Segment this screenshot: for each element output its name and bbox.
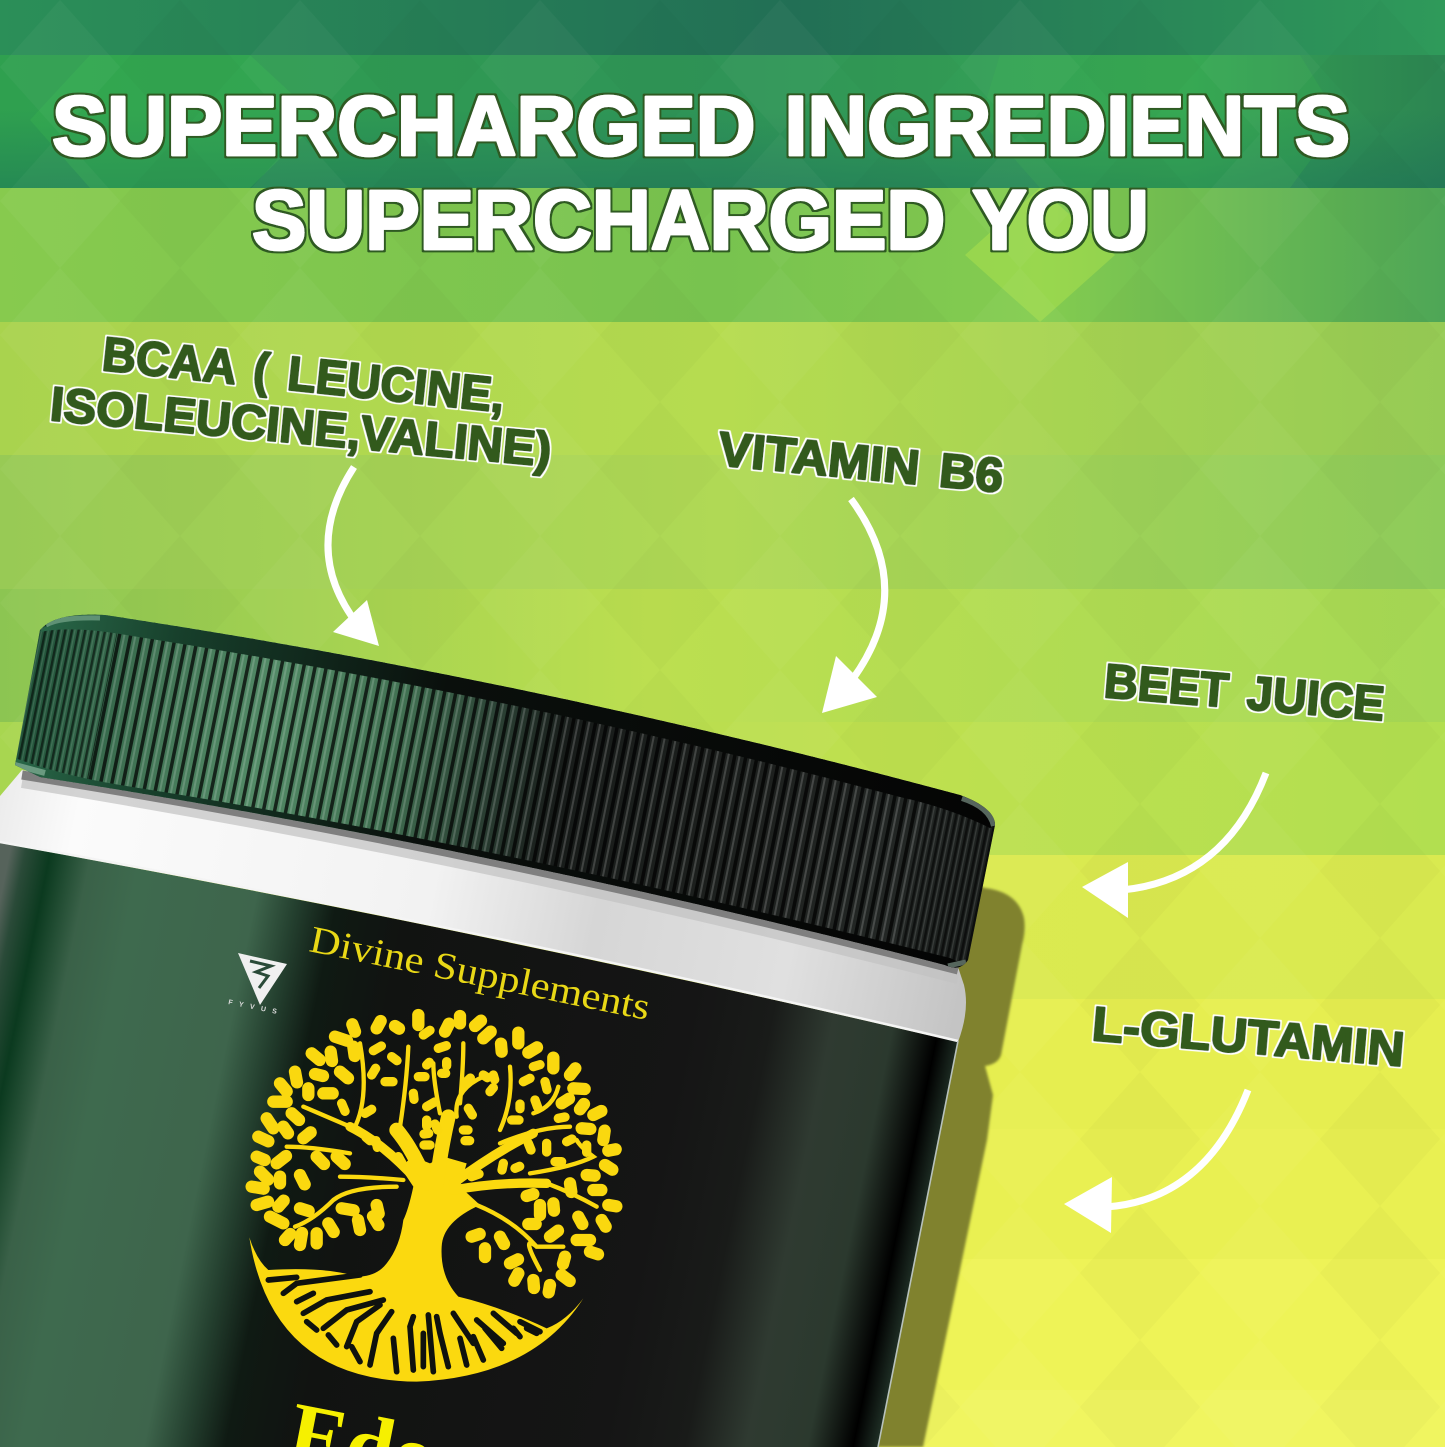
jar body [0,843,958,1447]
arrow: Beet Juice to jar [1082,773,1266,918]
jar neck [0,770,966,1042]
jar cap [15,614,995,968]
title: SUPERCHARGED INGREDIENTS [52,79,1350,173]
brand logo [228,953,287,1017]
label: BCAA [48,328,554,477]
label: BCAA: BCAA ( LEUCINE, [100,328,507,423]
jar shadow [860,880,1025,1447]
arrow: Vitamin B6 to jar [822,499,885,713]
arrow: BCAA to jar [328,467,379,646]
tree of life emblem [249,1015,616,1382]
jar edge highlights [0,842,958,1447]
branches [397,1117,448,1183]
brand name: Divine Supplements: Divine Supplements [306,919,654,1029]
title: SUPERCHARGED YOU [252,173,1149,267]
leaves [252,1015,616,1292]
label: Beet Juice: BEET JUICE [1102,655,1387,731]
title [52,79,1350,267]
label: Vitamin B6: VITAMIN B6 [716,423,1006,503]
label: L-Glutamin: L-GLUTAMIN [1090,998,1406,1077]
label: BCAA: ISOLEUCINE,VALINE) [48,378,554,477]
supplement jar [0,600,1010,1447]
brand logo: FYVUS [228,999,284,1017]
trunk and roots [249,1157,583,1382]
arrow: L-Glutamin to jar [1064,1090,1248,1233]
